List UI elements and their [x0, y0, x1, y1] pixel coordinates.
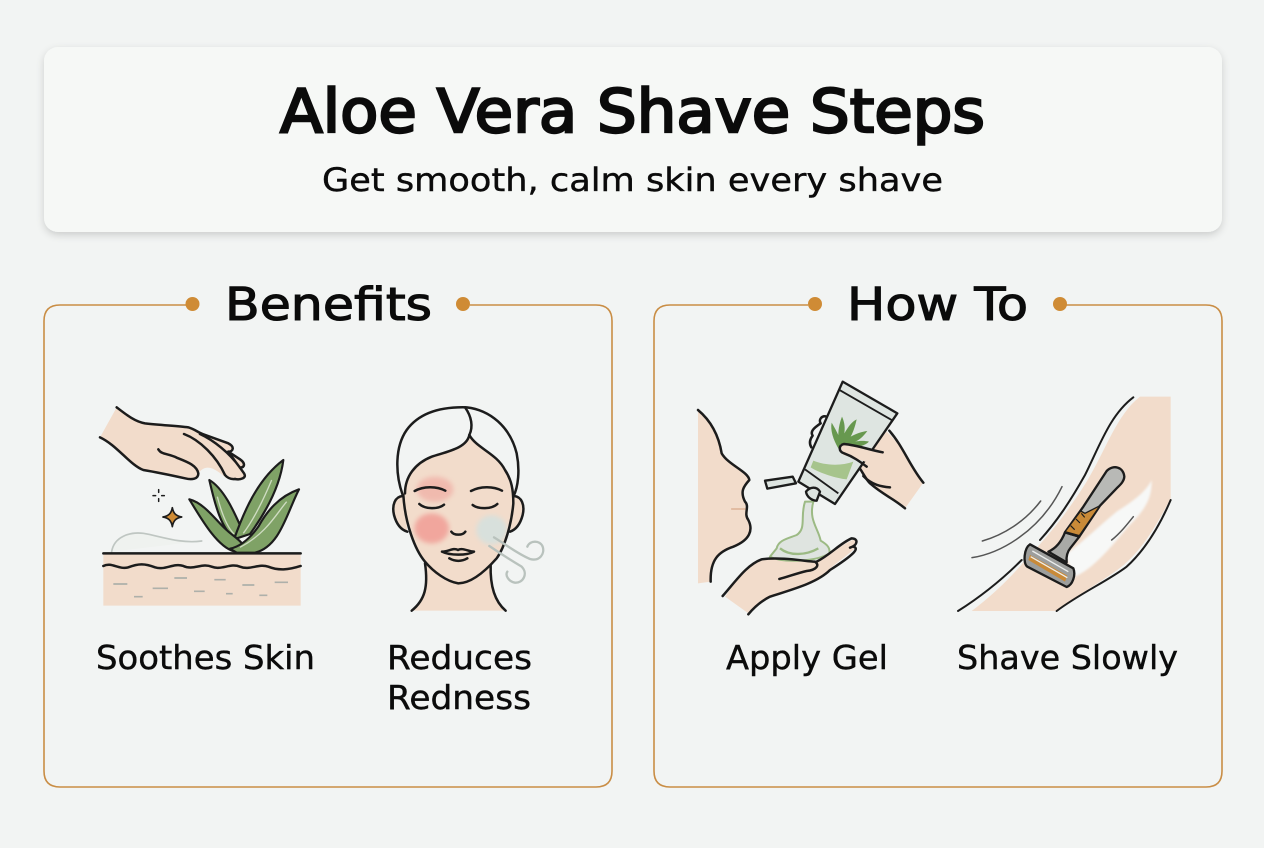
- panel: benefits: [44, 278, 612, 787]
- icon: hand over aloe plant on skin: [100, 407, 301, 606]
- benefits heading dot right: [456, 297, 470, 311]
- icon: face with redness: [393, 407, 543, 611]
- label: soothes skin: Soothes Skin: [96, 638, 315, 677]
- label: reduces redness: Reduces: [387, 638, 532, 677]
- subtitle: Get smooth, calm skin every shave: [322, 161, 943, 199]
- benefits heading dot left: [186, 297, 200, 311]
- icon: razor on skin: [958, 397, 1171, 611]
- header card: [44, 47, 1222, 232]
- label: reduces redness: [387, 638, 532, 717]
- how to heading dot right: [1053, 297, 1067, 311]
- title: Aloe Vera Shave Steps: [280, 77, 985, 147]
- label: apply gel: Apply Gel: [726, 638, 888, 677]
- how to heading: How To: [847, 278, 1028, 331]
- label: reduces redness: Redness: [387, 678, 531, 717]
- panel: how to: [654, 278, 1222, 787]
- how to heading dot left: [808, 297, 822, 311]
- icon: applying gel from tube: [698, 382, 923, 614]
- benefits heading: Benefits: [225, 278, 432, 331]
- label: shave slowly: Shave Slowly: [957, 638, 1178, 677]
